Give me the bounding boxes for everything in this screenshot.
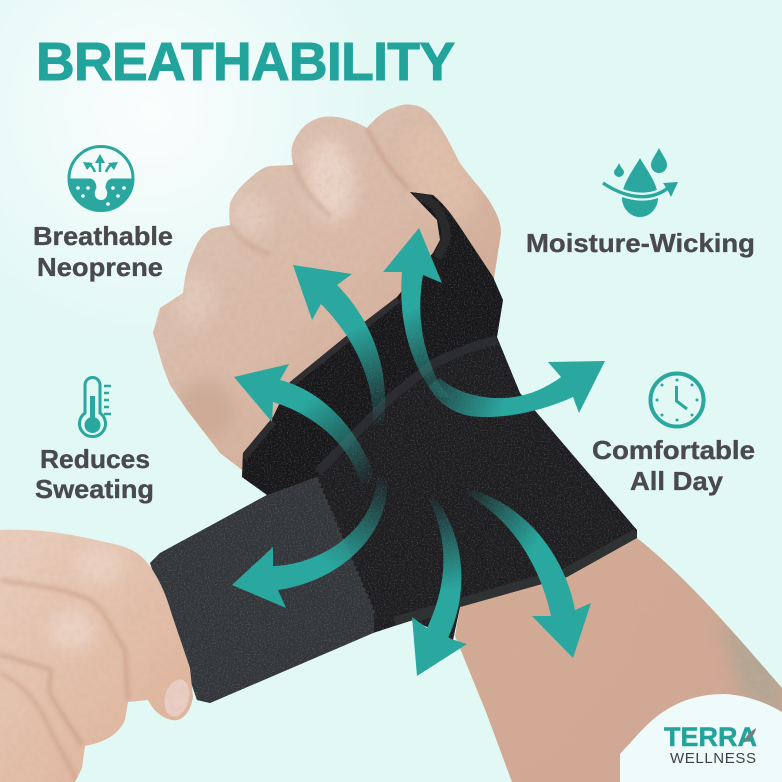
arrow: down-right [460, 490, 591, 658]
label: breathable neoprene: Breathable [33, 221, 173, 251]
feature: breathable neoprene: Neoprene [37, 252, 163, 282]
brace: strap seam [318, 340, 497, 472]
label: reduces sweating: Reduces [40, 444, 150, 474]
brace: top binding [290, 299, 398, 384]
feature: reduces sweating [35, 378, 154, 504]
brace: felt texture [140, 180, 650, 710]
feature: comfortable all day: All Day [630, 466, 724, 496]
arrow: down [412, 495, 467, 676]
feature: moisture-wicking [526, 148, 755, 258]
arrow: up-left [293, 265, 385, 428]
arrow: up [383, 228, 452, 398]
label: moisture-wicking: Moisture-Wicking [526, 228, 755, 258]
brace: neoprene tab [150, 476, 374, 703]
feature: breathable neoprene [33, 146, 173, 282]
logo: WELLNESS [670, 750, 756, 767]
arrow: left lower [232, 476, 387, 608]
brace: thumb binding [414, 194, 446, 258]
brace: cuff binding [395, 534, 637, 622]
brace: flap binding [243, 421, 273, 458]
photo: wrist brace [140, 180, 650, 710]
feature: reduces sweating: Sweating [35, 474, 154, 504]
label: comfortable all day: Comfortable [592, 435, 755, 465]
title: BREATHABILITY [36, 33, 455, 92]
icon: clock [650, 374, 704, 426]
logo [664, 722, 757, 767]
brace: velcro body [140, 180, 650, 710]
icon: thermometer [80, 378, 111, 437]
arrow: left upper [234, 364, 375, 484]
icon: droplets and wick arrow [603, 148, 678, 217]
icon: breathable fabric [68, 146, 134, 212]
photo: forearm below brace [450, 530, 782, 782]
photo: gripping fingers [0, 525, 200, 782]
brace: tab seam [316, 478, 374, 614]
arrow: right [428, 361, 605, 417]
logo: TERRA [664, 722, 757, 752]
brace: upper flap [242, 192, 503, 495]
logo corner panel [620, 694, 782, 782]
photo: clenched fist [150, 100, 510, 475]
feature: comfortable all day [592, 374, 755, 496]
